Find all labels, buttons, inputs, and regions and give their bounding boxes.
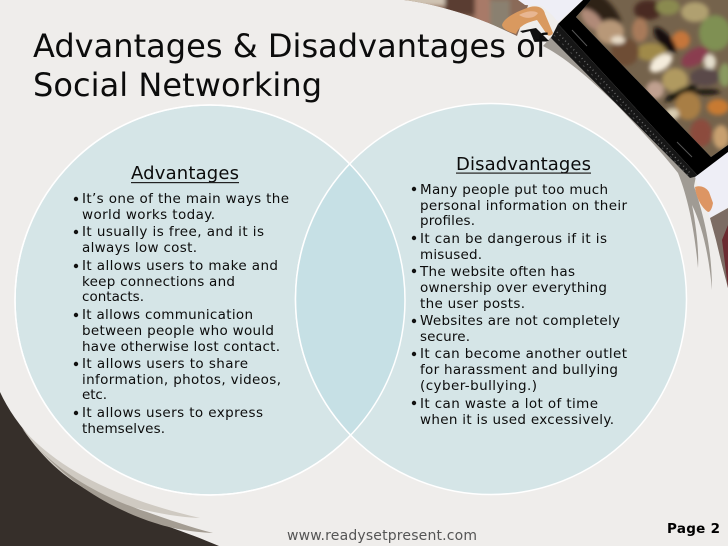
text block: disadvantages list: for harassment and bullying [420,362,618,378]
text block: advantages list: world works today. [82,207,215,223]
text block: disadvantages list: The website often has [419,264,575,280]
top right photo frame [400,0,728,290]
text block: disadvantages list: personal information on their [420,198,627,214]
black frame [558,0,728,176]
title: Advantages & Disadvantages of [33,27,548,65]
text block: advantages list: It allows users to make and [82,258,278,274]
text block: disadvantages list: secure. [420,329,470,345]
text block: advantages list: It allows users to share [82,356,248,372]
title: Social Networking [33,66,322,104]
text block: disadvantages list: profiles. [420,213,475,229]
heading: advantages: Advantages [131,163,239,184]
text block: disadvantages list: when it is used excessively. [420,412,614,428]
text block: advantages list [74,191,289,437]
panel: disadvantages circle [296,104,686,494]
text block: disadvantages list: Many people put too much [420,182,608,198]
text block: advantages list: It allows users to express [82,405,263,421]
text block: advantages list: keep connections and [82,274,235,290]
circle outline overlap [15,105,405,495]
heading: disadvantages: Disadvantages [456,154,591,175]
gray shadow under frame [543,36,712,290]
blurred photo [570,0,728,160]
text block: advantages list: between people who would [82,323,274,339]
footer url: www.readysetpresent.com [287,528,477,544]
text block: disadvantages list: Websites are not completely [420,313,620,329]
text block: disadvantages list: (cyber-bullying.) [420,378,537,394]
text block: disadvantages list: misused. [420,247,482,263]
title [33,27,548,104]
icon: hand holding frame top [502,0,583,42]
frame speckled edge [551,24,698,178]
text block: disadvantages list: ownership over everything [420,280,607,296]
text block: advantages list: information, photos, videos, [82,372,281,388]
corner swoosh: dark bottom left [0,392,219,546]
icon: hand and cuff at right [695,152,728,288]
top photo strip [404,0,528,36]
venn diagram [15,104,686,495]
text block: advantages list: etc. [82,387,107,403]
page number: Page 2 [667,521,720,537]
text block: advantages list: It’s one of the main ways the [82,191,289,207]
text block: disadvantages list: It can waste a lot of time [420,396,598,412]
venn intersection [294,165,404,435]
text block: disadvantages list [412,182,627,428]
text block: advantages list: have otherwise lost contact. [82,339,280,355]
text block: advantages list: It usually is free, and it is [82,224,264,240]
text block: disadvantages list: the user posts. [420,296,525,312]
text block: advantages list: contacts. [82,289,144,305]
panel: advantages circle [15,105,405,495]
text block: advantages list: always low cost. [82,240,197,256]
text block: advantages list: It allows communication [82,307,253,323]
text block: disadvantages list: It can be dangerous if it is [420,231,607,247]
text block: disadvantages list: It can become another outlet [420,346,627,362]
text block: advantages list: themselves. [82,421,165,437]
